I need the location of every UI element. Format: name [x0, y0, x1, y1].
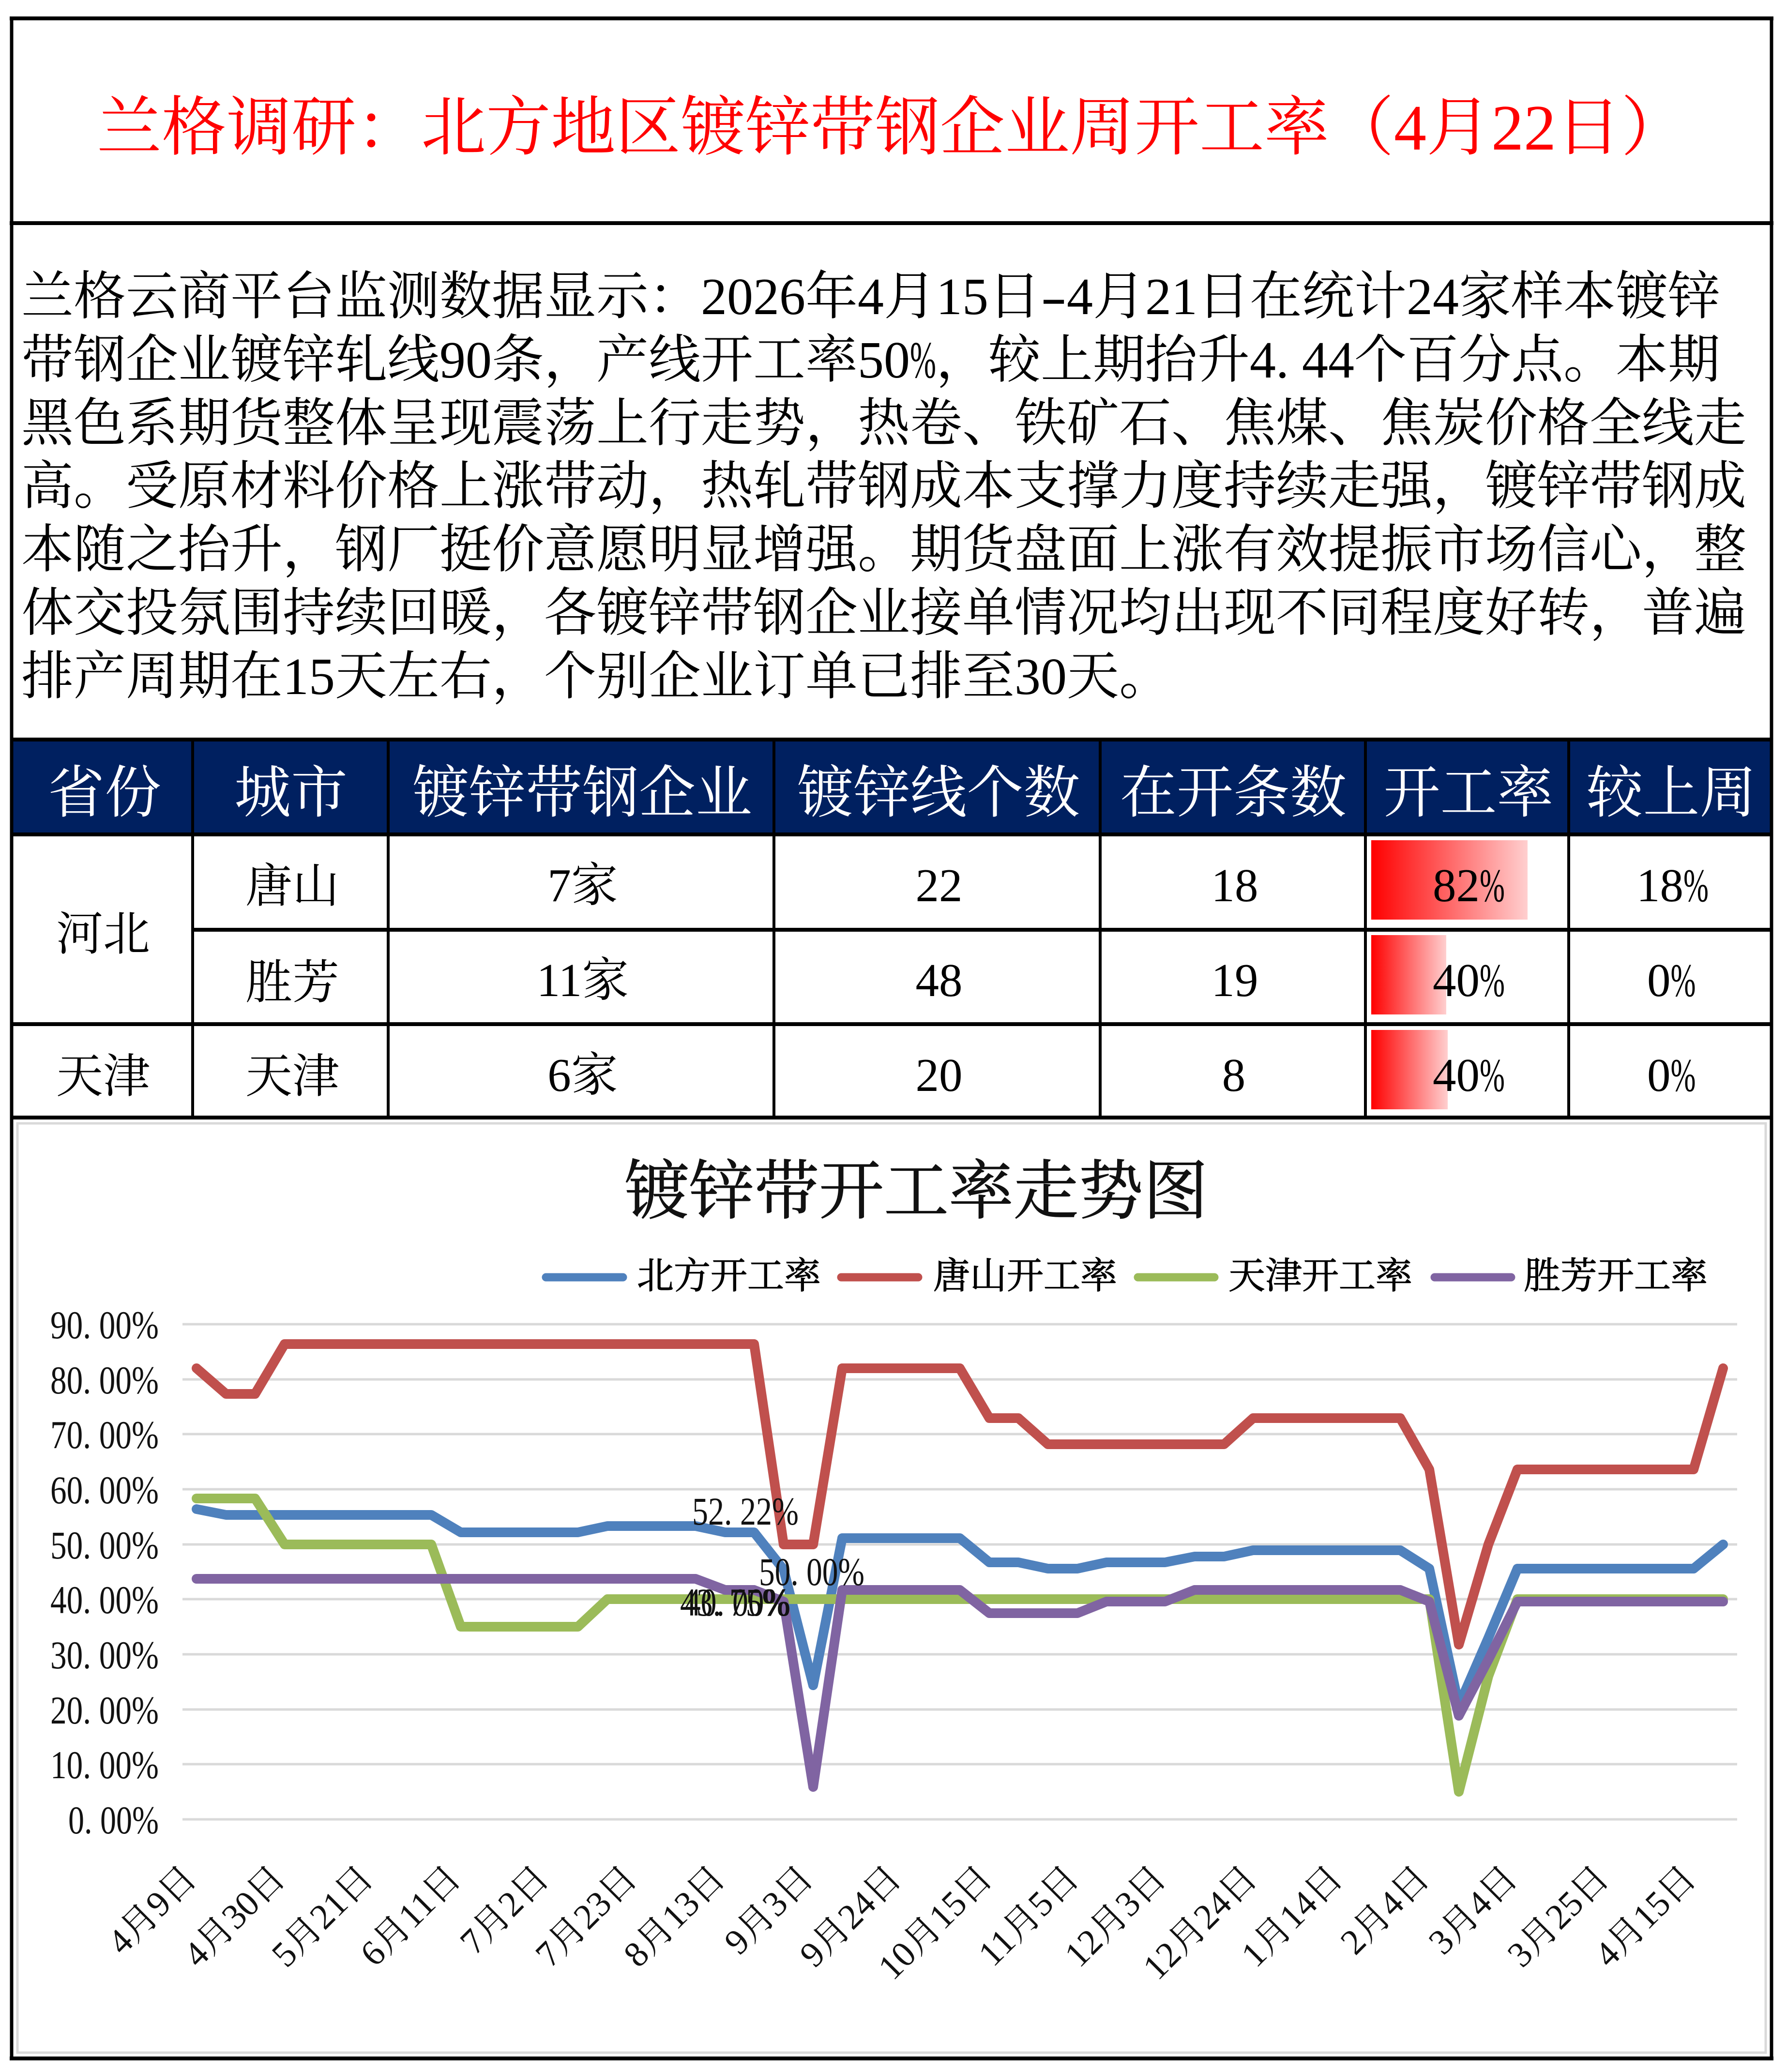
- data labels: 43. 75%: [680, 1580, 789, 1624]
- data labels: [680, 1489, 864, 1624]
- line chart panel: [17, 1123, 1766, 2053]
- x axis labels: 6月11日: [353, 1858, 469, 1974]
- table header row: 较上周: [1586, 762, 1757, 825]
- table row: 天津: 6家: [547, 1049, 618, 1101]
- x axis labels: 2月4日: [1333, 1858, 1437, 1962]
- series: 天津开工率: [197, 1498, 1723, 1792]
- x axis labels: 7月2日: [453, 1858, 557, 1962]
- data table: [12, 740, 1772, 1118]
- series: 胜芳开工率: [197, 1579, 1723, 1787]
- title: 兰格调研：北方地区镀锌带钢企业周开工率（4月22日）: [97, 92, 1686, 164]
- legend: 唐山开工率: [933, 1256, 1117, 1297]
- y axis labels: 80. 00%: [50, 1358, 159, 1402]
- x axis labels: 11月5日: [971, 1858, 1087, 1974]
- x axis labels: 3月4日: [1421, 1858, 1525, 1962]
- table header row: 城市: [234, 762, 348, 825]
- legend: [546, 1256, 1708, 1297]
- y axis labels: 70. 00%: [50, 1413, 159, 1457]
- data labels: 52. 22%: [692, 1489, 799, 1533]
- table row: 河北 唐山: 82%: [1433, 860, 1505, 911]
- table header row: 省份: [48, 762, 161, 825]
- x axis labels: 4月9日: [100, 1858, 204, 1962]
- text block: summary paragraph: 体交投氛围持续回暖，各镀锌带钢企业接单情况均出现不同程度好转，普遍: [21, 585, 1746, 642]
- series: 唐山开工率: [197, 1344, 1723, 1645]
- data labels: 50. 00%: [759, 1550, 864, 1594]
- table header row: 开工率: [1383, 762, 1554, 825]
- table row: 河北 唐山: [56, 860, 1709, 960]
- y axis labels: 0. 00%: [68, 1798, 159, 1842]
- table row: 河北 唐山: 18: [1211, 860, 1258, 911]
- table row: 天津: 8: [1222, 1049, 1245, 1101]
- table row: 天津: 0%: [1647, 1049, 1696, 1101]
- data labels: 40. 00%: [685, 1580, 790, 1624]
- text block: summary paragraph: 本随之抬升，钢厂挺价意愿明显增强。期货盘面上涨有效提振市场信心，整: [21, 521, 1746, 579]
- table row: 胜芳: 0%: [1647, 954, 1696, 1006]
- table row: 胜芳: 40%: [1433, 954, 1505, 1006]
- x axis labels: 7月23日: [528, 1858, 645, 1975]
- x axis labels: 8月13日: [616, 1858, 733, 1975]
- text block: summary paragraph: [21, 268, 1746, 706]
- chart title: 镀锌带开工率走势图: [624, 1156, 1208, 1227]
- legend: 胜芳开工率: [1524, 1256, 1708, 1297]
- x axis labels: 9月3日: [717, 1858, 821, 1962]
- table row: 天津: 天津: [245, 1051, 339, 1103]
- table row: 胜芳: 11家: [537, 954, 629, 1006]
- x axis labels: 1月14日: [1234, 1858, 1350, 1975]
- y axis labels: 40. 00%: [50, 1578, 159, 1622]
- text block: summary paragraph: 黑色系期货整体呈现震荡上行走势，热卷、铁矿石、焦煤、焦炭价格全线走: [21, 395, 1746, 453]
- table row: 河北 唐山: 18%: [1636, 860, 1709, 911]
- table row: 胜芳: 19: [1211, 954, 1258, 1006]
- title panel: [12, 18, 1772, 223]
- x axis labels: 12月24日: [1136, 1858, 1265, 1987]
- table row: 天津: 20: [916, 1049, 962, 1101]
- x axis labels: 3月25日: [1500, 1858, 1617, 1975]
- x axis labels: [100, 1858, 1704, 1987]
- table header row: 在开条数: [1120, 762, 1347, 825]
- table row: 天津: [56, 1049, 1696, 1103]
- x axis labels: 4月15日: [1587, 1858, 1704, 1975]
- y axis labels: [50, 1303, 159, 1842]
- utilisation bars: [1371, 840, 1528, 1109]
- table row: 河北 唐山: 唐山: [245, 861, 339, 912]
- y axis labels: 90. 00%: [50, 1303, 159, 1347]
- x axis labels: 5月21日: [264, 1858, 381, 1975]
- text block: summary paragraph: 兰格云商平台监测数据显示：2026年4月15日-4月21日在统计24家样本镀锌: [21, 268, 1720, 326]
- series: 北方开工率: [197, 1509, 1723, 1706]
- y axis labels: 60. 00%: [50, 1468, 159, 1512]
- text block: summary paragraph: 排产周期在15天左右，个别企业订单已排至30天。: [21, 648, 1171, 706]
- y axis labels: 10. 00%: [50, 1743, 159, 1787]
- legend: 天津开工率: [1228, 1256, 1412, 1297]
- table row: 胜芳: [245, 954, 1696, 1009]
- y axis labels: 30. 00%: [50, 1633, 159, 1677]
- text block: summary paragraph: 带钢企业镀锌轧线90条，产线开工率50%，较上期抬升4.44个百分点。本期: [21, 332, 1720, 389]
- text block: summary paragraph: 高。受原材料价格上涨带动，热轧带钢成本支撑力度持续走强，镀锌带钢成: [21, 458, 1746, 515]
- table row: 胜芳: 48: [916, 954, 962, 1006]
- x axis labels: 12月3日: [1057, 1858, 1174, 1975]
- y axis labels: 20. 00%: [50, 1688, 159, 1732]
- table row: 河北 唐山: 22: [916, 860, 962, 911]
- table header row: 镀锌带钢企业: [412, 762, 752, 825]
- table row: 胜芳: 胜芳: [245, 957, 339, 1009]
- table row: 天津: 天津: [56, 1051, 150, 1103]
- table row: 河北 唐山: 河北: [56, 908, 150, 960]
- table row: 天津: 40%: [1433, 1049, 1505, 1101]
- x axis labels: 4月30日: [176, 1858, 293, 1975]
- x axis labels: 10月15日: [871, 1858, 1000, 1987]
- legend: 北方开工率: [637, 1256, 821, 1297]
- table header row: 镀锌线个数: [797, 762, 1080, 825]
- y axis labels: 50. 00%: [50, 1523, 159, 1567]
- x axis labels: 9月24日: [792, 1858, 909, 1975]
- table header row: [12, 740, 1772, 834]
- table row: 河北 唐山: 7家: [547, 860, 618, 911]
